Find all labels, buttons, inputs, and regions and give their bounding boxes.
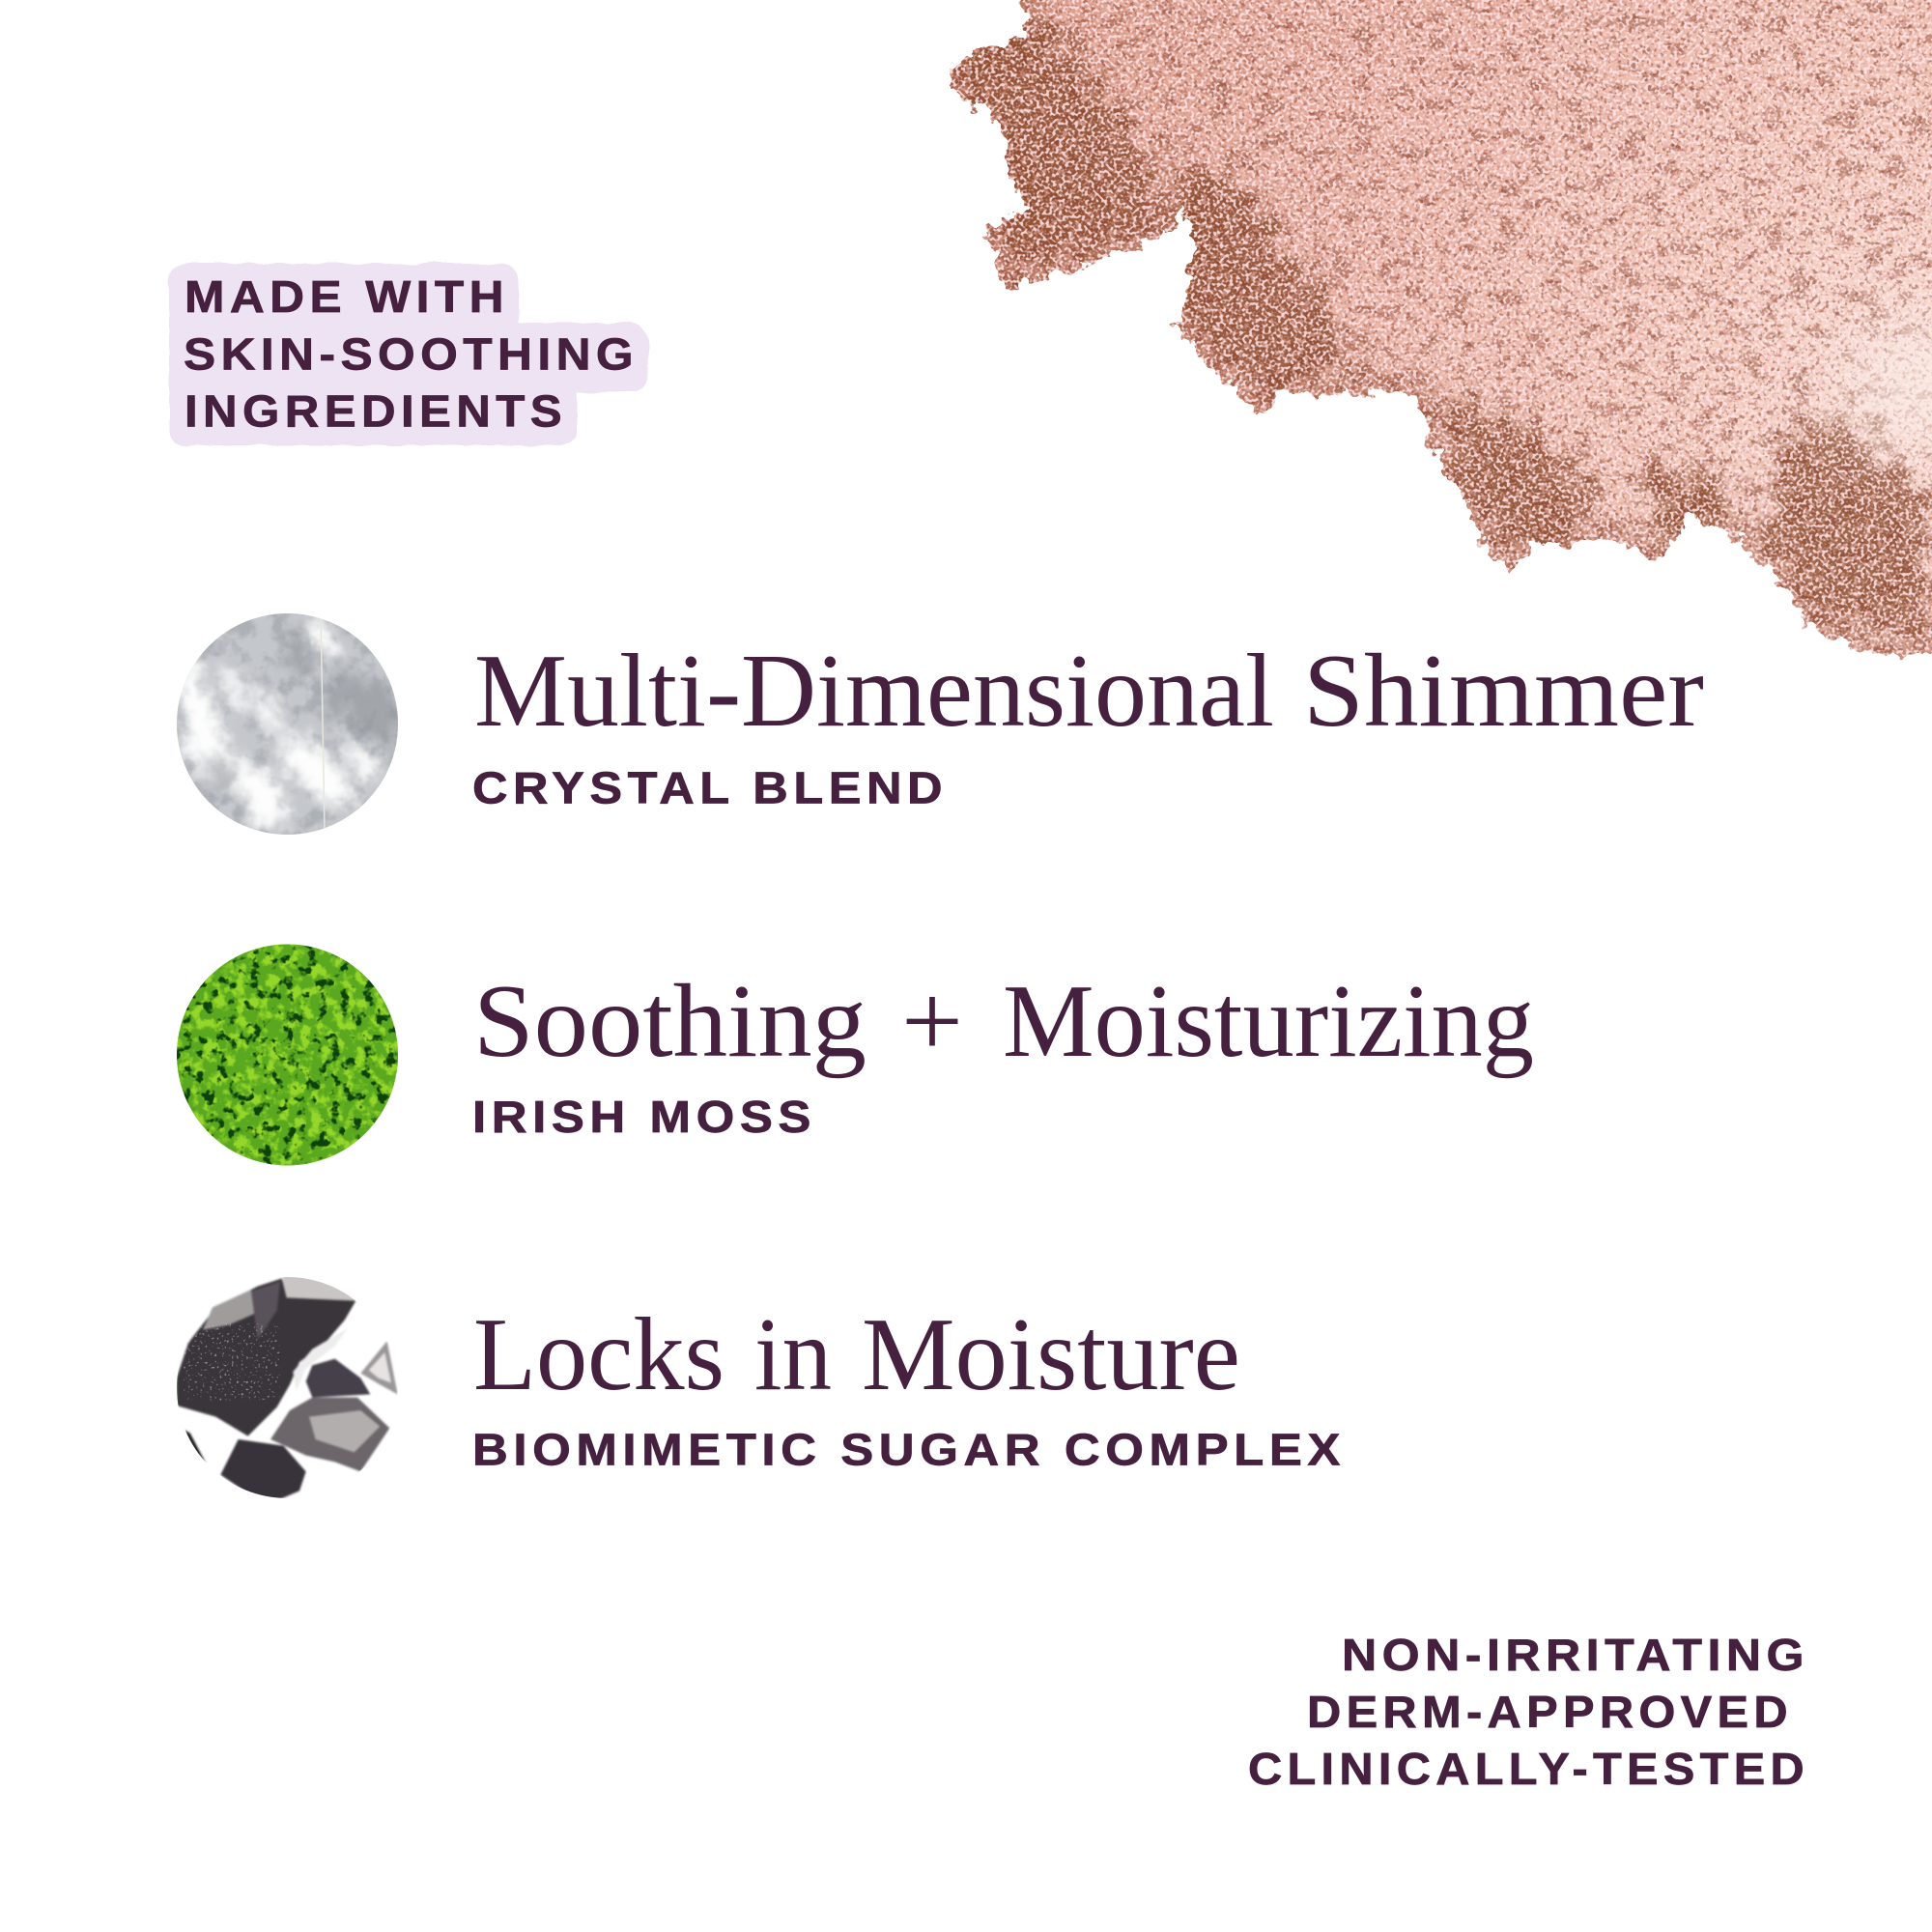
heading: Moisturizing — [1003, 964, 1534, 1079]
sublabel: BIOMIMETIC SUGAR COMPLEX — [472, 1424, 1346, 1474]
heading: Locks — [473, 1297, 724, 1412]
heading — [473, 1297, 1240, 1412]
row 3: locks in moisture — [177, 1275, 1346, 1500]
sublabel: CRYSTAL BLEND — [472, 763, 948, 813]
heading: Soothing — [473, 964, 867, 1079]
icon: crystal blend marble texture — [174, 611, 401, 838]
heading — [474, 634, 1704, 749]
highlight behind callout text — [169, 264, 648, 445]
footer claims: NON-IRRITATING — [1342, 1630, 1809, 1680]
heading: Moisture — [862, 1297, 1240, 1412]
footer claims: DERM-APPROVED — [1307, 1687, 1793, 1737]
callout: made with skin-soothing ingredients — [169, 264, 648, 445]
footer claims — [1248, 1630, 1809, 1794]
heading: in — [754, 1297, 832, 1412]
sublabel: IRISH MOSS — [472, 1092, 816, 1142]
callout text: MADE WITH — [185, 271, 509, 322]
row 2: soothing + moisturizing — [174, 942, 1534, 1169]
icon: irish moss texture — [174, 942, 401, 1169]
footer claims: CLINICALLY-TESTED — [1248, 1744, 1809, 1794]
heading — [473, 964, 1534, 1079]
callout text — [184, 271, 639, 437]
image: shimmer makeup swatch — [927, 0, 1932, 676]
heading: Shimmer — [1303, 634, 1704, 749]
icon: biomimetic sugar crystals — [177, 1275, 398, 1500]
heading: Multi-Dimensional — [474, 634, 1274, 749]
callout text: INGREDIENTS — [185, 386, 567, 437]
row 1: multi-dimensional shimmer — [174, 611, 1704, 838]
callout text: SKIN-SOOTHING — [184, 328, 639, 379]
heading: + — [901, 964, 963, 1079]
